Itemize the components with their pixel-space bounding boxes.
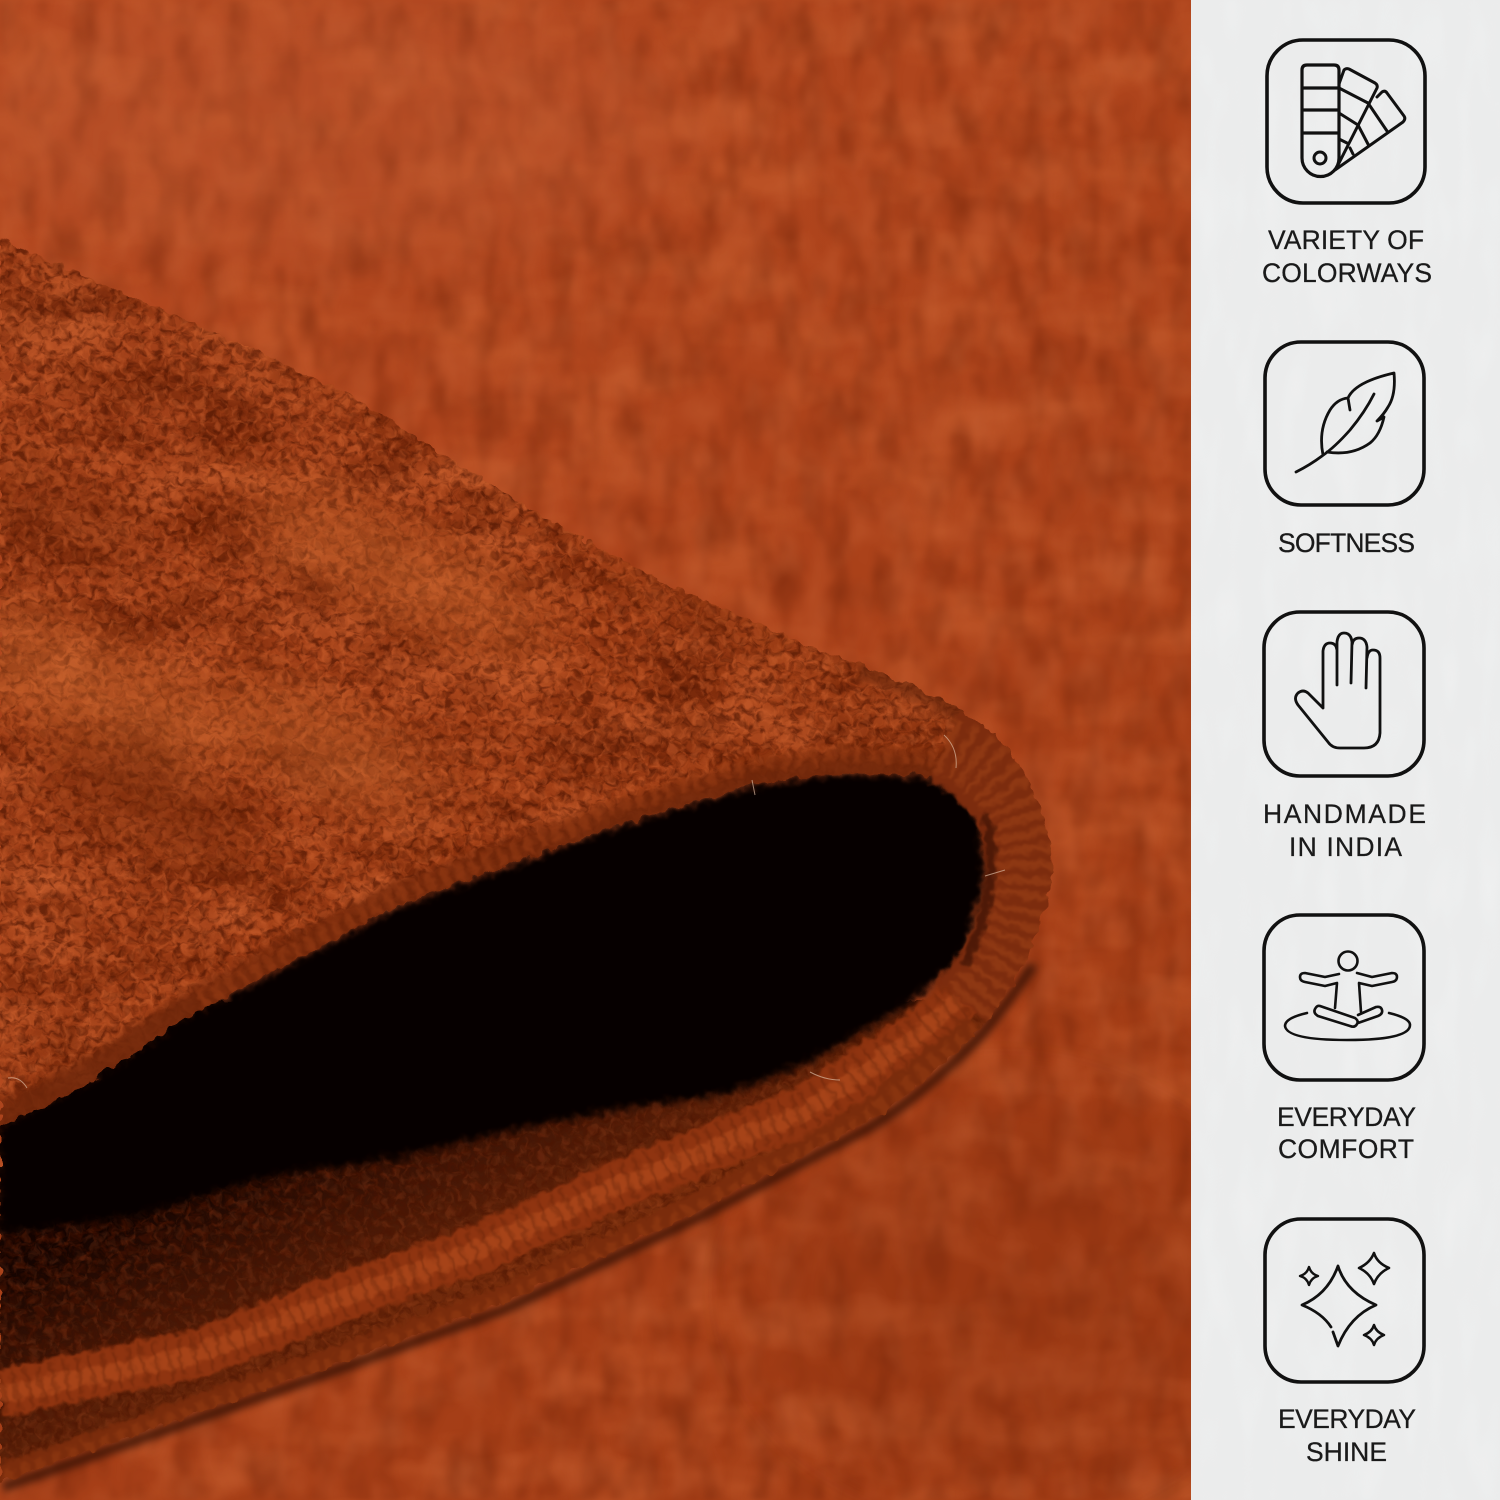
feature: variety of colorways (1262, 40, 1432, 288)
feature: softness (1265, 342, 1424, 558)
photo: folded rust rug (0, 0, 1191, 1500)
folded rug (0, 238, 1054, 1483)
label: VARIETY OF (1268, 225, 1424, 255)
panel: features sidebar (1191, 0, 1500, 1500)
icon: seated meditation figure (1264, 915, 1424, 1080)
feature: everyday shine (1265, 1219, 1424, 1467)
label: SOFTNESS (1278, 528, 1415, 558)
icon: feather (1265, 342, 1424, 505)
top face of the fold (0, 238, 1013, 1126)
loose fibres on rim (8, 735, 1005, 1088)
icon: sparkles (1265, 1219, 1424, 1382)
label: SHINE (1306, 1437, 1387, 1467)
bound edge rope of lower fold (0, 985, 979, 1482)
feature: handmade in india (1263, 612, 1426, 862)
label: HANDMADE (1263, 799, 1426, 829)
label: COLORWAYS (1262, 258, 1432, 288)
dark opening inside fold (0, 772, 985, 1233)
label: COMFORT (1278, 1134, 1414, 1164)
right rim of fold (945, 745, 1025, 1007)
feature: everyday comfort (1264, 915, 1424, 1164)
label: IN INDIA (1289, 832, 1402, 862)
label: EVERYDAY (1277, 1102, 1416, 1132)
fold shadow on background (3, 965, 1033, 1487)
icon: colour swatch fan (1267, 40, 1425, 203)
label: EVERYDAY (1278, 1404, 1416, 1434)
underside of the rug (0, 1000, 986, 1483)
icon: open hand (1264, 612, 1424, 776)
